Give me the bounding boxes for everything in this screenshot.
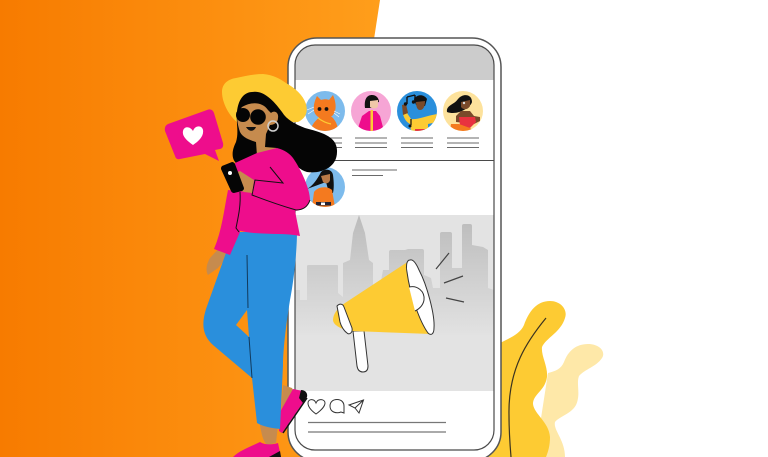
sound lines	[436, 253, 464, 302]
screen header bar	[295, 45, 494, 80]
thumb	[228, 171, 232, 175]
icon: comment bubble	[330, 400, 344, 413]
sunglasses	[236, 108, 266, 125]
city skyline	[296, 216, 494, 312]
background leaf, pale yellow	[535, 344, 603, 457]
stories divider	[334, 160, 494, 161]
megaphone cone	[333, 261, 431, 334]
hat	[222, 74, 307, 124]
post avatar	[305, 167, 345, 207]
icon: white heart	[183, 126, 203, 145]
megaphone collar	[337, 304, 352, 334]
held phone	[221, 162, 244, 193]
torso outline	[236, 192, 240, 232]
like speech bubble	[165, 109, 223, 161]
post caption lines	[308, 422, 446, 432]
sleeve outline	[252, 167, 310, 210]
leaf vein	[509, 318, 546, 457]
post image panel	[295, 215, 494, 391]
story caption lines	[309, 138, 479, 148]
jeans seams	[247, 255, 252, 378]
phone screen outline	[295, 45, 494, 450]
front ankle	[259, 420, 278, 445]
front shoe	[233, 442, 281, 457]
story: guitar avatar	[443, 91, 483, 131]
back shoe toe	[299, 390, 307, 403]
hand holding phone	[230, 171, 254, 193]
earring	[268, 121, 278, 131]
lower hand	[207, 245, 231, 275]
pink top	[233, 148, 310, 236]
back sleeve	[214, 190, 242, 255]
icon: like heart	[308, 400, 325, 414]
story: music avatar	[397, 91, 437, 132]
back shoe body	[279, 389, 307, 433]
jeans	[203, 232, 297, 429]
megaphone mouth	[406, 260, 434, 334]
foreground leaf, yellow	[480, 301, 566, 457]
story: pink jacket avatar	[351, 91, 391, 131]
hair	[233, 92, 337, 172]
mouth	[246, 127, 256, 131]
back shoe	[279, 385, 307, 433]
megaphone handle	[353, 331, 368, 372]
front shoe toe	[269, 451, 281, 457]
phone screen	[295, 45, 494, 432]
story: cat avatar	[305, 91, 345, 131]
bubble body	[165, 109, 223, 161]
megaphone inner cone	[409, 287, 424, 311]
post title lines	[352, 170, 397, 176]
icon: share arrow	[349, 400, 364, 413]
megaphone	[333, 253, 464, 372]
neck and face	[237, 103, 278, 156]
back ankle	[281, 385, 296, 412]
smartphone	[288, 38, 501, 457]
back shoe sole	[283, 398, 307, 433]
phone outer body	[288, 38, 501, 457]
woman character	[203, 74, 337, 457]
orange gradient background	[0, 0, 380, 457]
